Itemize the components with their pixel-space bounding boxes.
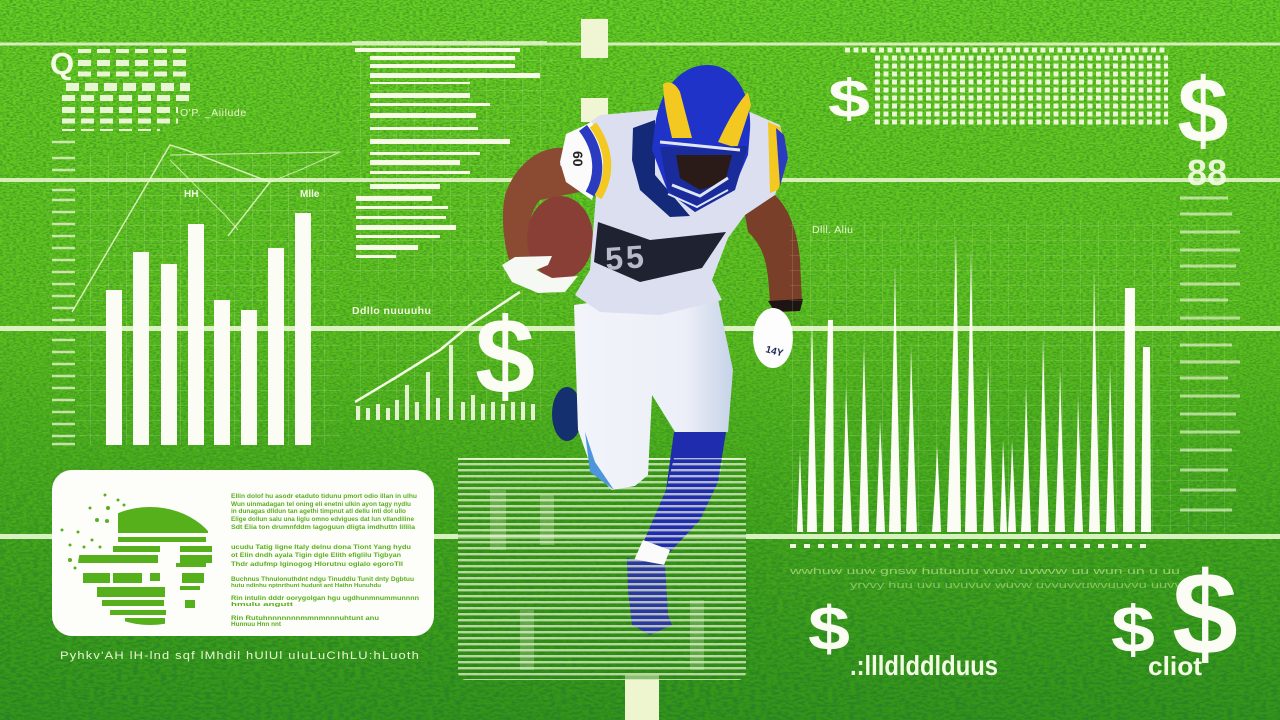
card text: Wun uinmadagan tel oning eli enetni ulkin ayon tagy nydlu xyxy=(231,501,411,508)
bottom label right: cliot xyxy=(1148,651,1202,681)
jersey number band xyxy=(594,222,726,282)
scattered dots xyxy=(60,494,126,570)
chart: left bar chart with line overlay: Mlle xyxy=(300,189,320,200)
icon: dollar sign bottom right: $ xyxy=(1172,548,1238,680)
shoulder number: 60 xyxy=(570,151,586,167)
jersey xyxy=(560,110,788,315)
chart: right spike chart xyxy=(788,220,1238,590)
panel: bottom-left card xyxy=(52,470,434,636)
card text: Rin intulin dddr oorygolgan hgu ugdhunmnummunnnn xyxy=(231,595,419,602)
icon: globe xyxy=(60,494,212,625)
collar xyxy=(632,120,690,217)
small rows under chart: wwhuw uuw gnsw hutuuuu wuw uvwvw uu wun un u uu xyxy=(788,566,1180,576)
card text: Rin Rutuhnnnnnnnmmnmnnnuhtunt anu xyxy=(231,615,379,622)
card text xyxy=(231,493,419,628)
small glyphs below top right dollar: 88 xyxy=(1187,152,1227,193)
hand xyxy=(753,308,793,368)
scan lines crossing sock and cleat xyxy=(627,458,724,634)
card text: in dunagas dlldun tan agethi timpnut atl dellu inti dol ullo xyxy=(231,508,406,515)
icon: dollar sign top right large: $ xyxy=(1177,60,1229,162)
cleat xyxy=(627,558,672,635)
illustration: running football player xyxy=(502,65,803,638)
knee shading xyxy=(585,432,614,490)
caption: Dlll. Aliu xyxy=(812,224,853,236)
panel: top-right dot matrix xyxy=(845,50,1168,122)
icon: dollar sign bottom left: $ xyxy=(808,595,850,664)
caption under card: Pyhkv'AH lH-lnd sqf lMhdil hUlUl uIuLuCIhLU:hLuoth xyxy=(60,650,420,662)
glove xyxy=(502,256,578,293)
white lower sock xyxy=(632,540,670,570)
icon: dollar sign bottom middle: $ xyxy=(1111,592,1155,666)
spikes xyxy=(797,235,1151,532)
card text: Buchnus Thnulonuthdnt ndgu Tinuddlu Tunit dnty Dgbtuu xyxy=(231,577,414,583)
wrist band xyxy=(768,299,803,312)
small bars xyxy=(358,345,533,420)
icon: magnifier glyph: Q xyxy=(50,46,74,81)
football xyxy=(527,196,593,280)
small caption: O'P. _Aiilude xyxy=(180,107,247,119)
bottom label left: .:llldlddlduus xyxy=(850,650,998,681)
front sock xyxy=(644,432,726,552)
panel: top-left dot matrix xyxy=(50,46,247,130)
bars xyxy=(106,213,311,445)
card text: hmulu angutt xyxy=(231,602,293,608)
jersey number: 55 xyxy=(604,238,648,277)
icon: dollar sign: $ xyxy=(475,295,535,416)
chart: middle growth chart with dollar sign xyxy=(352,290,557,420)
panel: right-side ticks xyxy=(1180,198,1240,510)
left arm xyxy=(503,148,580,262)
card text: Ellin dolof hu asodr etaduto tidunu pmort odio illan in ulhu xyxy=(231,493,417,500)
card text: Elige dollun salu una liglu omno edvigues dat lun vllandiline xyxy=(231,516,414,523)
helmet xyxy=(652,65,751,212)
right arm xyxy=(745,190,802,302)
trend lines xyxy=(72,145,270,312)
hand: 14Y xyxy=(764,344,785,360)
card text: Thdr adufmp Iginogog Hlorutnu oglalo egoroTll xyxy=(231,561,403,568)
growth line xyxy=(355,292,520,402)
chart: right spike chart: yrvvy huu uvu uvuvuv wuvw uvvuvvuwvuuvvu uuvvu xyxy=(850,580,1190,590)
card text: Hunnuu Hnn nnt xyxy=(231,621,282,628)
caption: Ddllo nuuuuhu xyxy=(352,305,431,317)
card text: ucudu Tatig ligne Italy delnu dona Tiont Yang hydu xyxy=(231,544,411,551)
chart: left bar chart with line overlay xyxy=(52,142,340,445)
back shoe xyxy=(552,387,582,441)
card text: hutu ndinhu nptnrthunt hudunt ant Hathn Hunuhdu xyxy=(231,583,381,589)
card text: ot Elin dndh ayala Tigin dgle Elith efiglilu Tigbyan xyxy=(231,552,401,559)
chart labels: HH xyxy=(184,189,198,200)
right shoulder stripes xyxy=(768,122,788,193)
left shoulder pad xyxy=(560,122,604,200)
panel: scan-line overlay rectangle xyxy=(458,458,746,680)
trousers xyxy=(574,285,733,490)
card text: Sdt Elia ton drumnfddm lagoguun dligta imdhuttn lillila xyxy=(231,524,415,531)
axis dots xyxy=(790,544,1152,548)
panel: horizontal list bars xyxy=(352,40,557,280)
icon: dollar sign top right small: $ xyxy=(828,69,870,129)
axis ticks xyxy=(52,142,75,444)
